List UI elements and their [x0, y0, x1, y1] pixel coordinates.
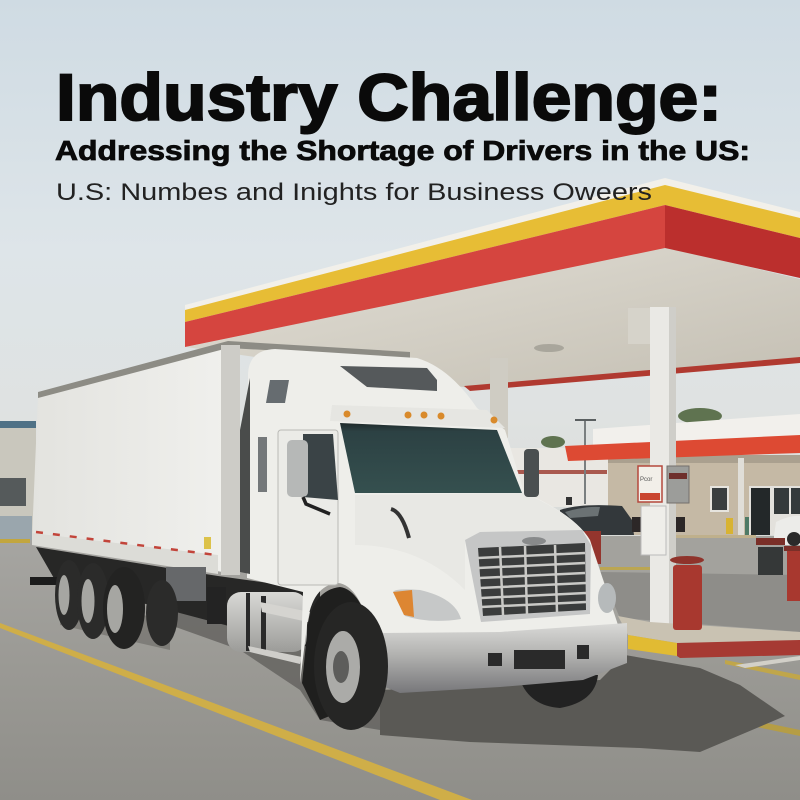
- hood shading: [355, 493, 588, 590]
- canopy front column: [628, 307, 676, 625]
- sleeper window: [340, 366, 437, 391]
- truck shadow: [60, 600, 785, 752]
- visor: [330, 405, 505, 428]
- canopy rear red edge: [464, 357, 800, 391]
- curb island: [618, 616, 800, 658]
- distant building: [508, 419, 608, 507]
- windshield: [340, 423, 522, 493]
- canopy light: [534, 344, 564, 352]
- grille: [465, 530, 591, 622]
- canopy fascia: [185, 178, 800, 347]
- door: [258, 430, 338, 585]
- chassis and tanks: [30, 547, 320, 664]
- canopy underside: [186, 247, 800, 388]
- ground: [0, 540, 800, 800]
- canopy rear column: [490, 358, 508, 438]
- cab: [247, 349, 618, 683]
- trees: [541, 408, 722, 448]
- subtitle: Addressing the Shortage of Drivers in the US:: [55, 135, 750, 166]
- right mirror: [524, 449, 539, 497]
- cab rear strip: [240, 378, 250, 574]
- pump signs: [638, 466, 689, 555]
- background sky: [0, 0, 800, 560]
- headlights: [393, 583, 616, 621]
- trash bins: [584, 531, 800, 630]
- forecourt: [590, 536, 800, 640]
- rear wheels: [55, 560, 178, 649]
- wheel well: [302, 587, 380, 720]
- bumper: [375, 623, 627, 693]
- gas station building: [565, 414, 800, 535]
- title: Industry Challenge:: [56, 60, 722, 134]
- front wheel: [314, 602, 388, 730]
- parking lines: [0, 623, 800, 800]
- forecourt stripes: [600, 535, 756, 570]
- under bumper tire: [520, 675, 598, 708]
- forecourt shade: [600, 572, 800, 632]
- bumper slots: [488, 645, 589, 669]
- hood mirror arm: [391, 509, 409, 538]
- amber marker lights: [344, 410, 498, 424]
- truck: [30, 341, 627, 730]
- cargo box: [32, 341, 410, 575]
- sleeper side window: [266, 380, 289, 403]
- parked cars: [560, 505, 800, 546]
- pump signs: Pcor: [640, 477, 652, 483]
- tagline: U.S: Numbes and Inights for Business Oweers: [56, 179, 652, 206]
- left building: [0, 421, 36, 543]
